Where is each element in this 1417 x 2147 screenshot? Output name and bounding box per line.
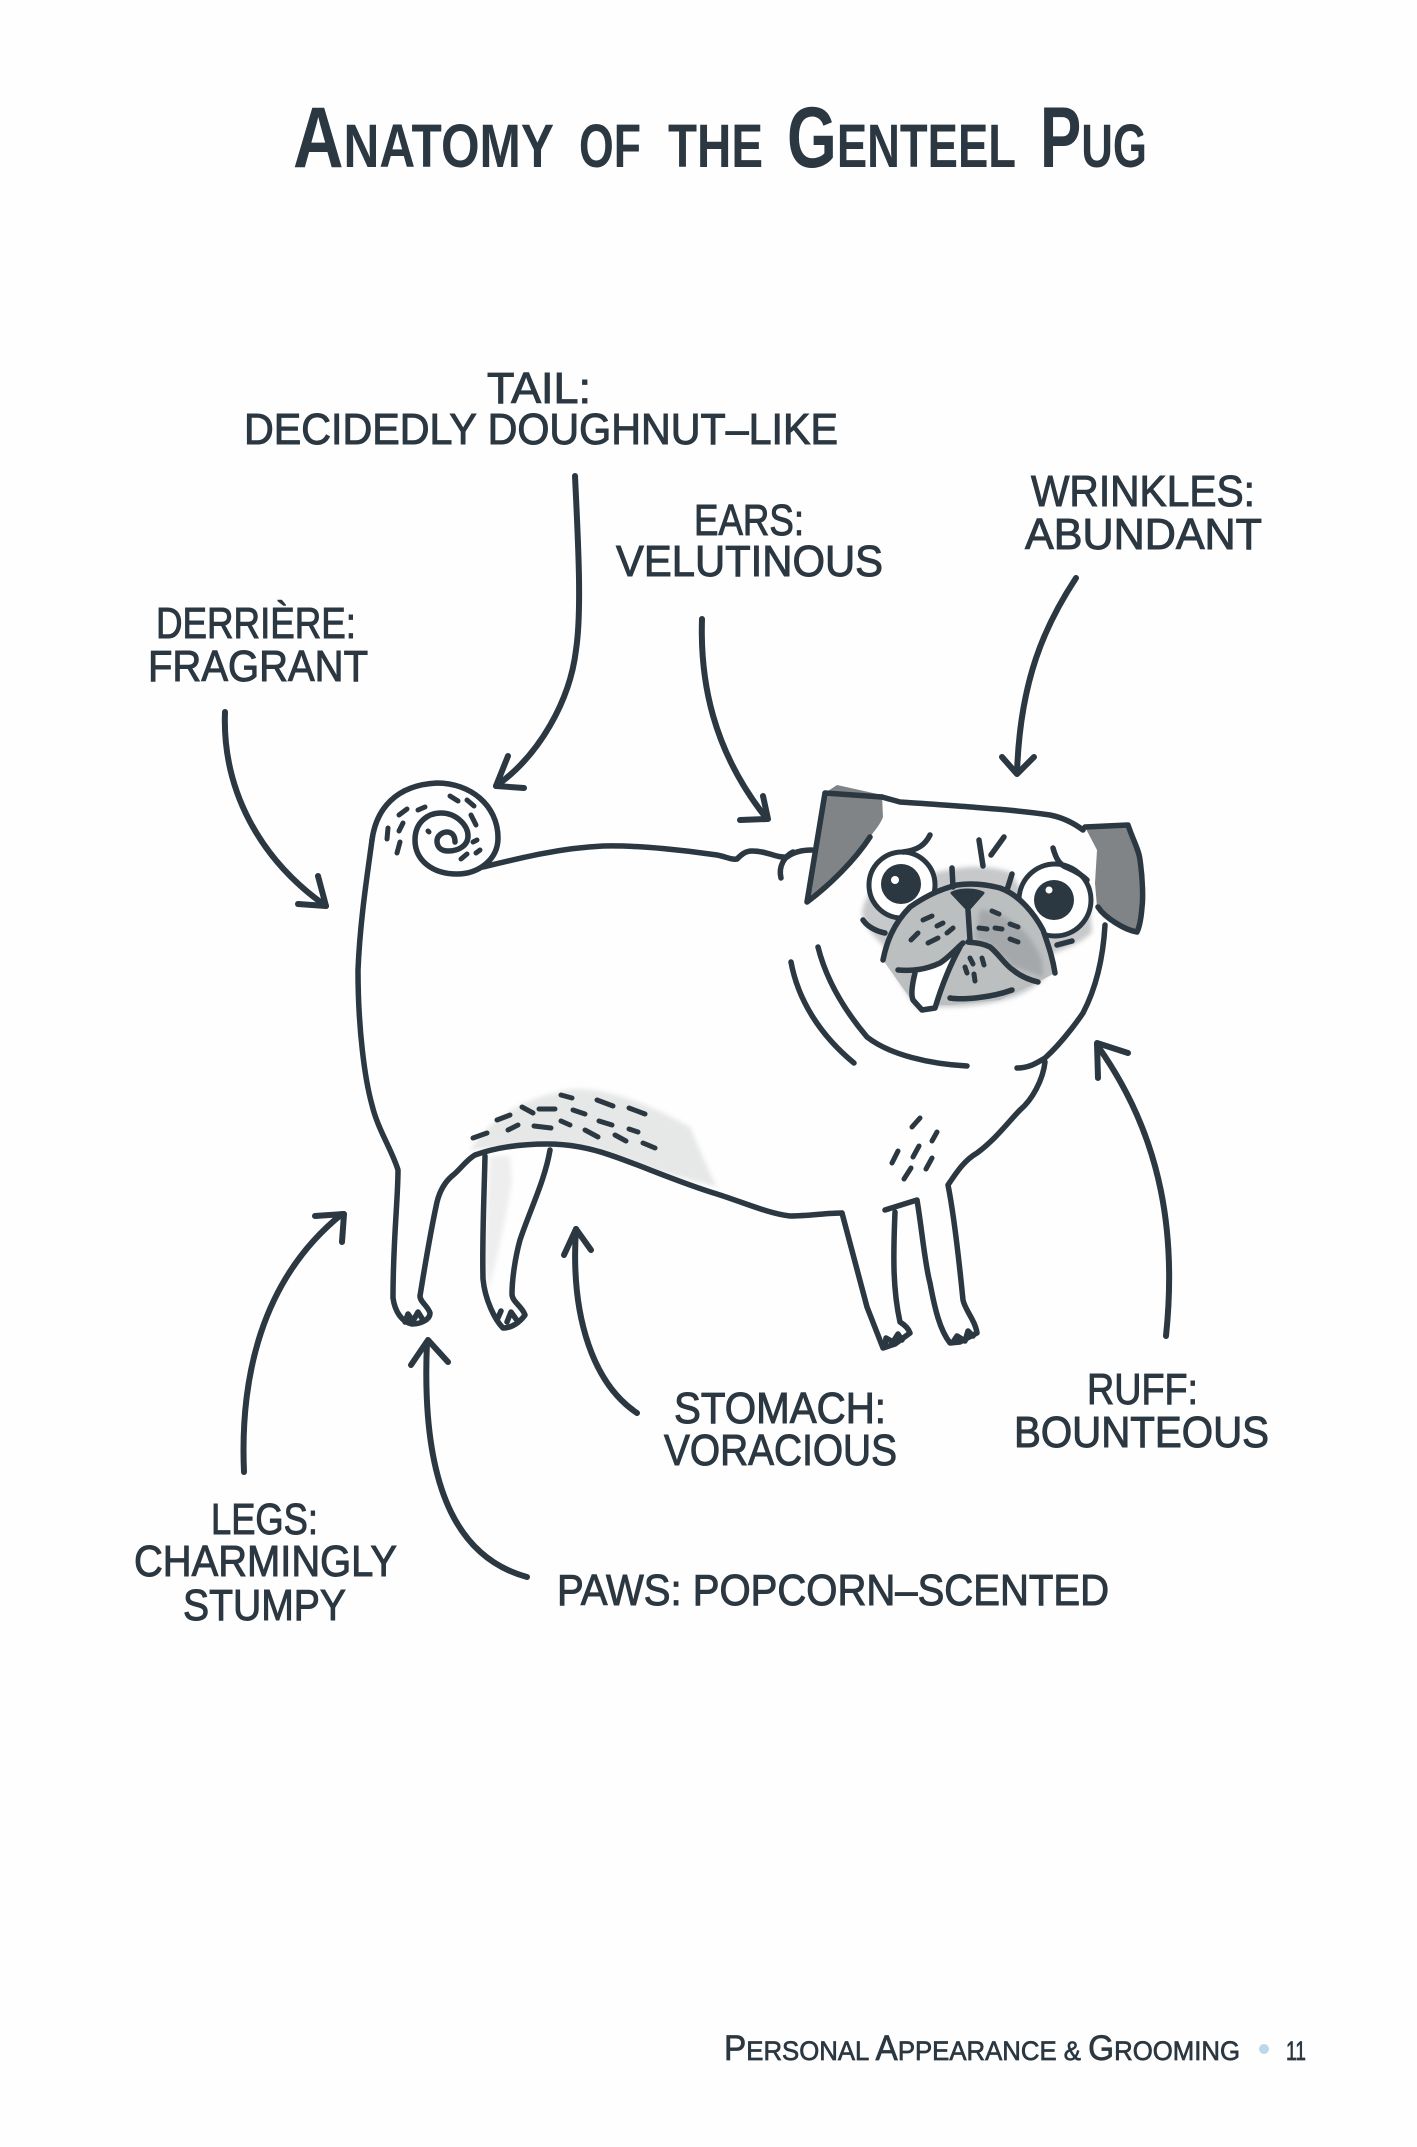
label: wrinkles [1025,467,1262,559]
label: derriere [148,599,368,691]
title: OF [579,112,641,180]
arrow: derriere [225,712,326,906]
label: stomach [664,1384,897,1475]
label: tail: TAIL: [487,364,591,413]
title: THE [668,112,763,180]
tongue [912,947,960,1010]
mouth [898,943,963,970]
label: ears: EARS: [694,496,804,545]
muzzle [883,884,1055,1005]
title: ANATOMY [293,90,554,186]
footer: dot [1259,2044,1269,2054]
grey shading: hind leg [484,1156,512,1290]
arrow: stomach [564,1229,637,1413]
arrow: ruff [1097,1043,1169,1336]
front legs and chest [842,1062,1045,1348]
label: wrinkles: WRINKLES: [1031,467,1255,516]
label: stomach: STOMACH: [674,1384,886,1433]
label: ears: VELUTINOUS [616,537,883,586]
eyes [869,852,935,918]
left ear [807,785,883,902]
label: derriere: DERRIÈRE: [156,599,356,648]
brows and wrinkles [903,835,930,852]
body outline [358,840,842,1324]
grey shading: face [862,867,1092,1007]
label: legs [134,1495,397,1630]
label: wrinkles: ABUNDANT [1025,510,1262,559]
footer: section name: PERSONAL APPEARANCE & GROOMING [724,2029,1240,2068]
pug illustration [358,783,1143,1348]
label: tail [244,364,838,454]
arrow: legs [244,1214,344,1472]
footer: page number: 11 [1286,2036,1306,2066]
label: ruff [1014,1365,1269,1457]
title: GENTEEL [787,90,1016,186]
hind far leg [483,1150,550,1328]
title: PUG [1040,90,1147,186]
arrow: paws [411,1340,527,1577]
arrow: ears [702,619,768,820]
label: tail: DECIDEDLY DOUGHNUT–LIKE [244,405,838,454]
stomach fur marks [473,1095,655,1148]
nose [952,890,983,910]
label: ruff: BOUNTEOUS [1014,1408,1269,1457]
muzzle whisker dots [911,911,1018,981]
arrow: wrinkles [1002,578,1076,774]
tail [372,783,498,874]
grey shading: stomach [470,1089,717,1187]
label: legs: CHARMINGLY [134,1537,397,1586]
title [293,90,1147,186]
head [807,785,1143,1010]
label: ruff: RUFF: [1087,1365,1198,1414]
right ear [1085,825,1142,932]
ruff and neck folds [791,925,1105,1068]
label: stomach: VORACIOUS [664,1426,897,1475]
label: legs: STUMPY [183,1581,346,1630]
head top line [882,797,1083,830]
label: paws: PAWS: POPCORN–SCENTED [557,1566,1109,1615]
label: derriere: FRAGRANT [148,642,368,691]
label: legs: LEGS: [211,1495,318,1544]
arrow: tail [496,476,579,788]
label: ears [616,496,883,586]
